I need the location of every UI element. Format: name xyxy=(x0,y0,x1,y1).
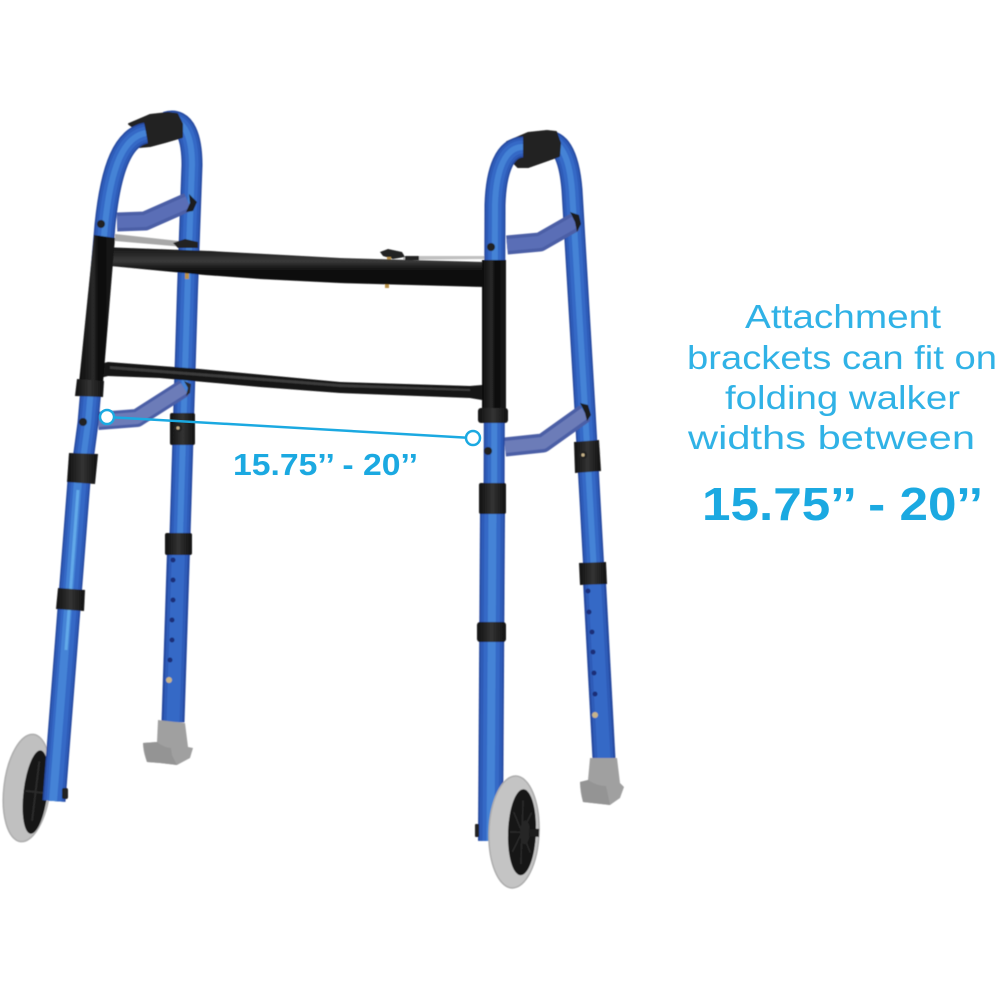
lower left brace xyxy=(98,381,191,421)
description text: folding walker xyxy=(725,379,960,416)
right black post xyxy=(482,260,506,410)
measurement label: 15.75’’ - 20’’ xyxy=(233,447,418,482)
left grip xyxy=(129,113,182,147)
left rubber tip xyxy=(143,720,193,765)
upper cross bar xyxy=(100,247,484,287)
front left tube xyxy=(53,133,146,801)
screws and adjustment holes xyxy=(62,220,598,837)
left wheel xyxy=(0,732,56,844)
description text: brackets can fit on xyxy=(687,339,997,376)
upper right brace xyxy=(507,212,581,245)
right rubber tip xyxy=(580,758,624,805)
description text: widths between xyxy=(687,419,975,456)
upper left brace xyxy=(117,194,197,222)
lower right brace xyxy=(505,403,591,447)
rear right tube xyxy=(546,141,604,759)
right grip xyxy=(507,131,560,167)
walker xyxy=(0,113,624,889)
lower cross bar xyxy=(100,362,482,400)
collars xyxy=(56,379,607,642)
width range callout: 15.75’’ - 20’’ xyxy=(702,478,983,530)
rear left tube xyxy=(166,121,192,722)
top latch strips xyxy=(115,234,485,288)
right wheel xyxy=(487,775,541,889)
left black post xyxy=(79,235,115,383)
description text: Attachment xyxy=(745,298,941,335)
description text xyxy=(687,298,997,456)
front right tube xyxy=(490,147,523,841)
width measurement line xyxy=(100,410,480,445)
